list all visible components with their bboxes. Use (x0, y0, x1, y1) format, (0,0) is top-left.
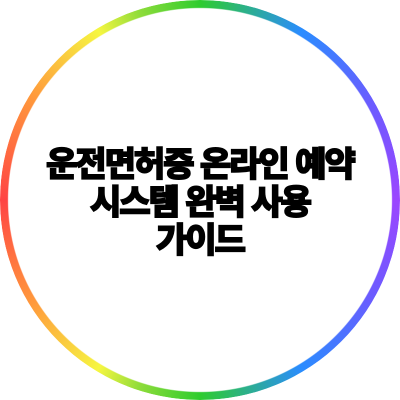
title: 운전면허증 온라인 예약 (46, 146, 354, 184)
title: 시스템 완벽 사용 (90, 184, 310, 222)
title (46, 146, 356, 260)
title: 가이드 (156, 222, 244, 260)
